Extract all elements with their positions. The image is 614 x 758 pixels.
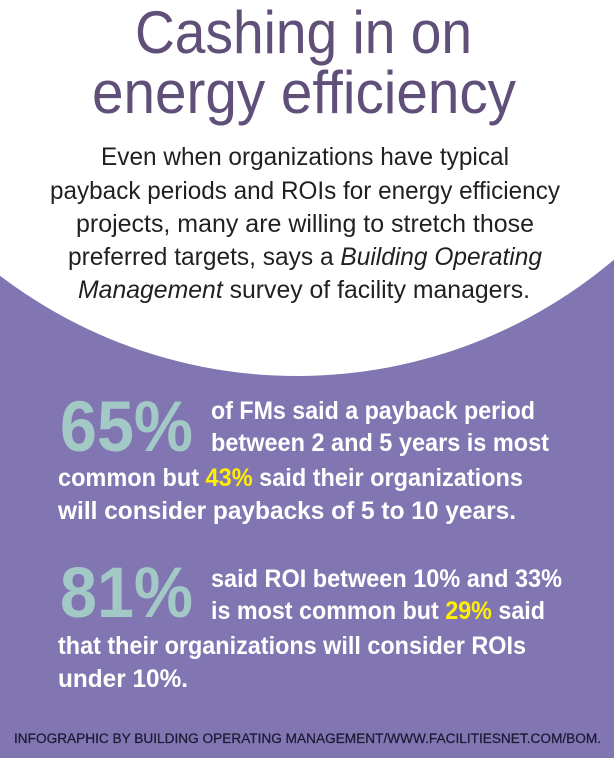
stat text: payback: will consider paybacks of 5 to 10 years. bbox=[57, 497, 516, 525]
stat text: payback: of FMs said a payback period bbox=[211, 397, 535, 425]
intro text block: Even when organizations have typical bbox=[101, 143, 509, 171]
title: energy efficiency bbox=[92, 59, 516, 126]
intro text block bbox=[50, 143, 560, 304]
stat block: 81% ROI bbox=[58, 554, 562, 693]
footer credit: INFOGRAPHIC BY BUILDING OPERATING MANAGEMENT/WWW.FACILITIESNET.COM/BOM. bbox=[14, 731, 601, 746]
stat text: payback: common but 43% said their organizations bbox=[58, 464, 523, 492]
stat text: payback bbox=[57, 397, 550, 525]
big number 81%: 81% bbox=[60, 554, 193, 633]
stat text: ROI bbox=[58, 565, 562, 693]
stat text: ROI: is most common but 29% said bbox=[211, 597, 545, 625]
stat text: ROI: said ROI between 10% and 33% bbox=[211, 565, 562, 593]
intro text block: preferred targets, says a Building Operating bbox=[68, 243, 542, 271]
stat block: 65% payback bbox=[57, 388, 550, 525]
title bbox=[92, 0, 516, 126]
stat text: ROI: under 10%. bbox=[58, 665, 188, 693]
intro text block: payback periods and ROIs for energy efficiency bbox=[50, 177, 560, 205]
white arc header panel bbox=[0, 0, 614, 376]
intro text block: Management survey of facility managers. bbox=[78, 276, 530, 304]
big number 65%: 65% bbox=[60, 388, 193, 467]
stat text: payback: between 2 and 5 years is most bbox=[211, 429, 550, 457]
intro text block: projects, many are willing to stretch those bbox=[76, 210, 534, 238]
title: Cashing in on bbox=[135, 0, 472, 66]
stat text: ROI: that their organizations will consider ROIs bbox=[58, 632, 526, 660]
